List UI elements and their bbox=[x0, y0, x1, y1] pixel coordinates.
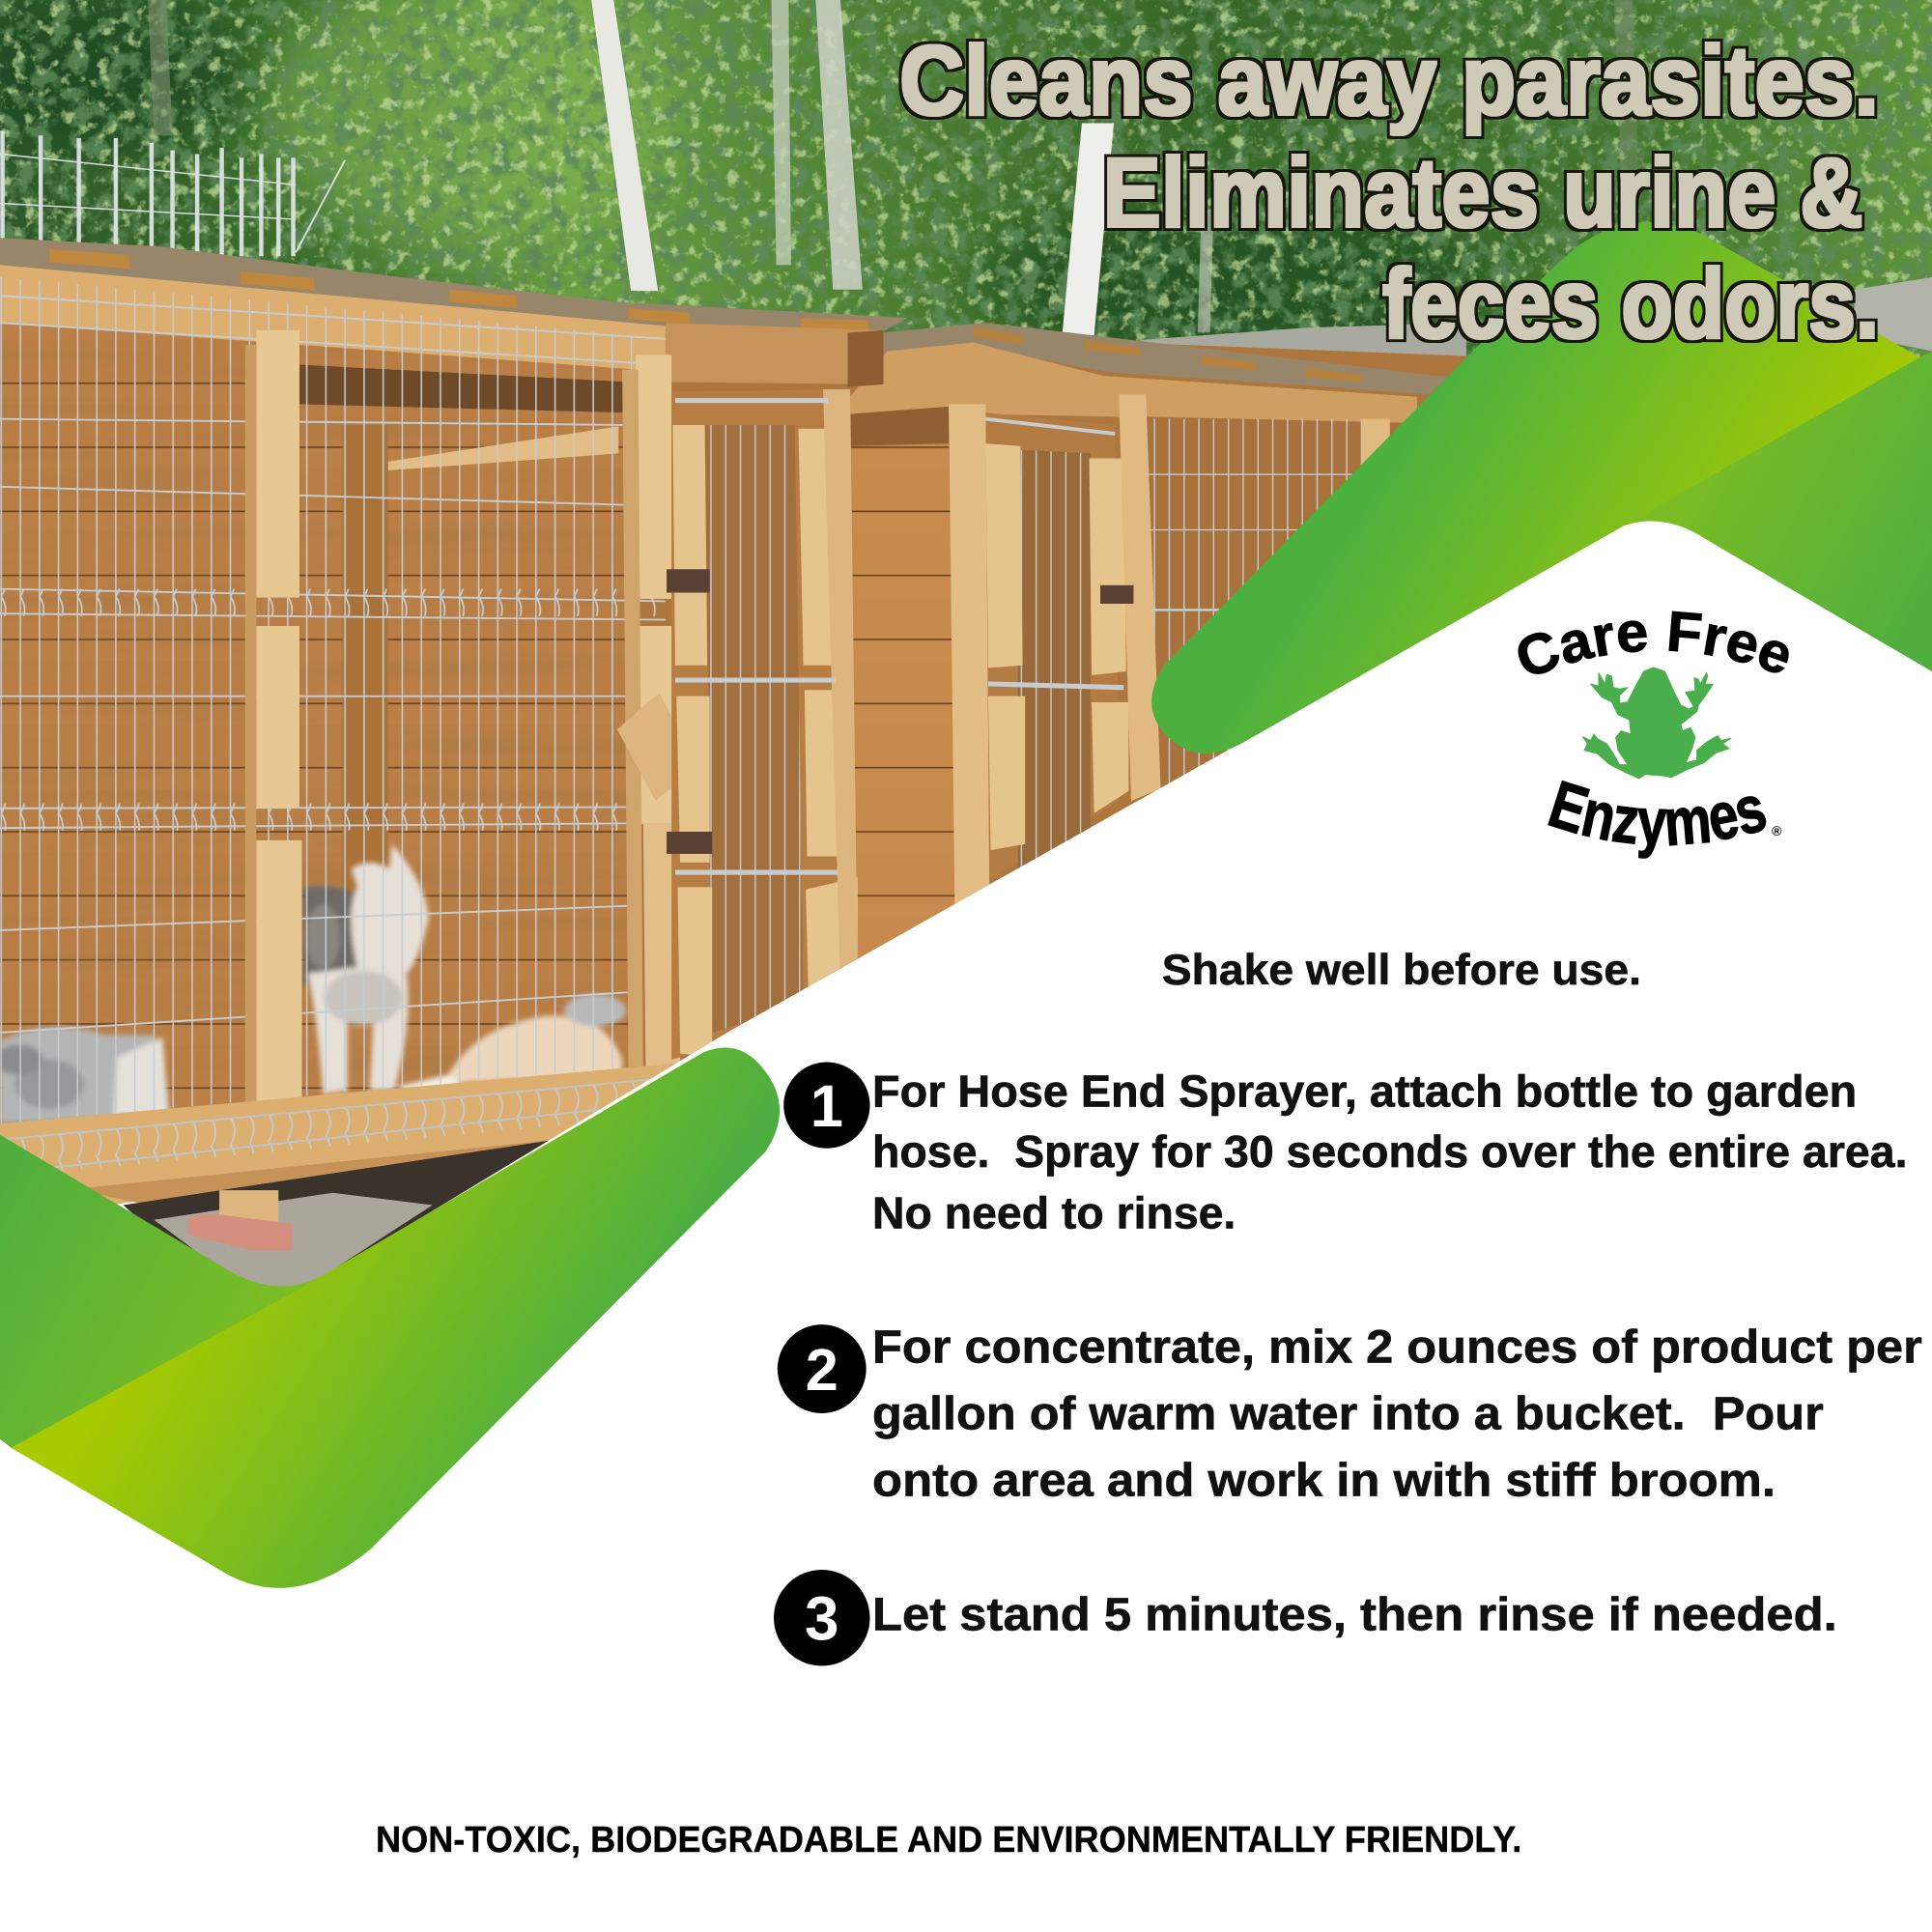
dog: resting husky left bbox=[0, 1027, 169, 1123]
title bbox=[899, 26, 1879, 358]
kennel one floor beam bbox=[0, 1062, 727, 1205]
number badge 2 bbox=[778, 1324, 867, 1413]
kennel one door bbox=[667, 389, 858, 1060]
kennel one top beam bbox=[0, 265, 671, 372]
step 2 bbox=[778, 1321, 1922, 1506]
icon: green frog bbox=[1582, 668, 1731, 779]
birch trunks bbox=[148, 0, 1638, 335]
wooden back fence bbox=[1140, 277, 1932, 355]
right green band bbox=[1479, 352, 1932, 671]
step 1 text bbox=[872, 1065, 1907, 1238]
wooden base behind kennels bbox=[616, 323, 1503, 1084]
step 1 text: hose. Spray for 30 seconds over the entire area. bbox=[872, 1126, 1907, 1177]
step 1 text: For Hose End Sprayer, attach bottle to garden bbox=[872, 1065, 1857, 1116]
number badge 2: 2 bbox=[806, 1337, 838, 1403]
logo: Care Free Enzymes bbox=[1519, 611, 1789, 859]
logo registered mark: ® bbox=[1772, 823, 1782, 838]
step 1 text: No need to rinse. bbox=[872, 1188, 1236, 1238]
forest background bbox=[0, 0, 1932, 368]
left green band bbox=[0, 1135, 370, 1448]
kennel one roof bbox=[0, 238, 908, 332]
logo text: Care Free: Care Free bbox=[1519, 611, 1789, 674]
photo: wooden dog kennels in birch forest bbox=[0, 0, 1932, 1300]
step 3 text: Let stand 5 minutes, then rinse if needed. bbox=[872, 1588, 1837, 1640]
number badge 1: 1 bbox=[810, 1073, 843, 1139]
step 2 text: gallon of warm water into a bucket. Pour bbox=[872, 1388, 1824, 1440]
dog: standing husky bbox=[303, 844, 429, 1094]
logo text: Enzymes: Enzymes bbox=[1548, 781, 1766, 859]
kennel one posts bbox=[245, 330, 697, 1109]
bottom green chevron bbox=[11, 1047, 780, 1588]
step 2 text: For concentrate, mix 2 ounces of product per bbox=[872, 1321, 1922, 1374]
number badge 1 bbox=[783, 1062, 870, 1149]
wire mesh of kennel one bbox=[0, 277, 666, 1123]
ground beneath kennel bbox=[124, 1140, 554, 1300]
dog: resting cream husky bbox=[397, 994, 626, 1094]
shake instruction: Shake well before use. bbox=[1162, 947, 1641, 994]
step 1 bbox=[783, 1062, 1907, 1238]
number badge 3 bbox=[774, 1570, 870, 1665]
kennel one back wall bbox=[0, 323, 640, 1127]
wire fence at back left bbox=[0, 130, 345, 256]
number badge 3: 3 bbox=[805, 1584, 838, 1654]
kennel two bbox=[850, 323, 1503, 963]
top green chevron bbox=[1151, 222, 1919, 753]
footer note: NON-TOXIC, BIODEGRADABLE AND ENVIRONMENTALLY FRIENDLY. bbox=[376, 1819, 1521, 1861]
step 2 text: onto area and work in with stiff broom. bbox=[872, 1454, 1776, 1506]
step 3 bbox=[774, 1570, 1837, 1665]
kennel one end beam bbox=[666, 323, 884, 384]
step 2 text bbox=[872, 1321, 1922, 1506]
